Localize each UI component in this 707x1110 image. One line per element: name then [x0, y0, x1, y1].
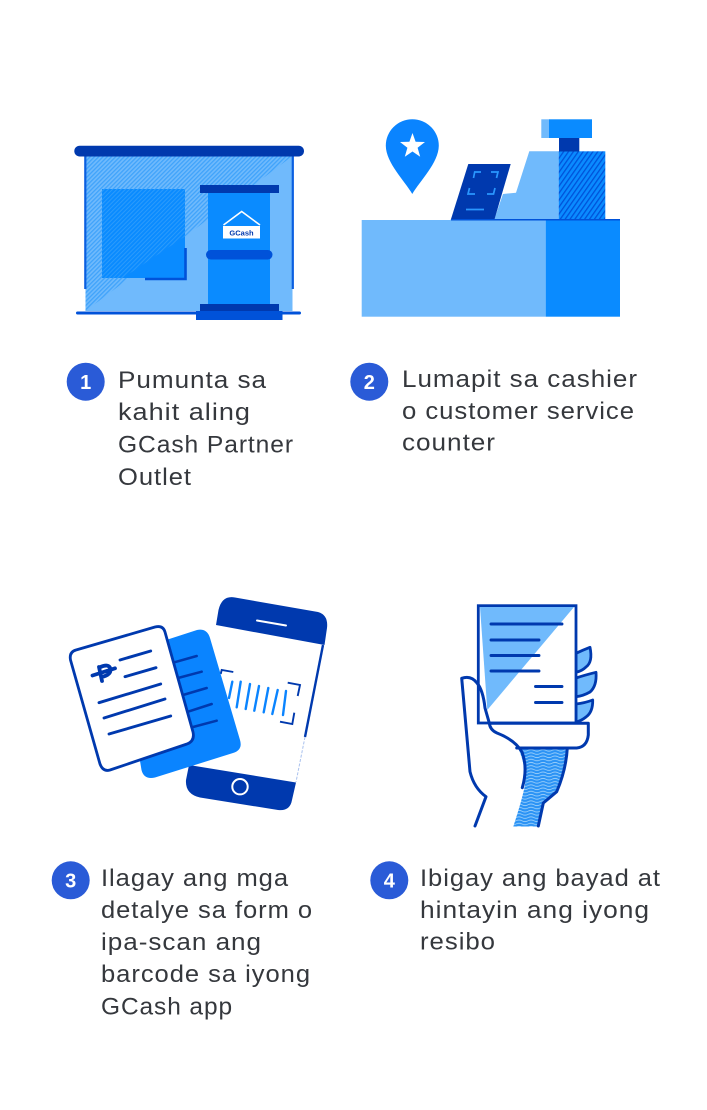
step 1: [67, 363, 294, 491]
store window: [102, 189, 186, 279]
phone: [186, 597, 327, 810]
barcode scan frame: [221, 670, 300, 724]
number badge 3: 3: [65, 870, 76, 892]
step 2 text: counter: [402, 430, 496, 456]
store roof: [74, 146, 304, 156]
card scanner: [451, 164, 511, 220]
number badge 3: [52, 861, 90, 899]
step 3 text: [101, 865, 313, 1020]
number badge 4: [370, 861, 408, 899]
receipt: [478, 606, 576, 723]
number badge 2: 2: [364, 372, 375, 394]
store ground and step: [76, 304, 301, 320]
number badge 4: 4: [384, 870, 396, 892]
step 2 text: Lumapit sa cashier: [402, 366, 638, 393]
step 2 text: [402, 366, 638, 456]
step 1 text: [118, 367, 294, 491]
step 4 text: Ibigay ang bayad at: [420, 865, 661, 892]
step 4 text: [420, 865, 661, 956]
store wall: [86, 156, 292, 311]
step 3 text: ipa-scan ang: [101, 929, 262, 956]
store side pillars: [84, 156, 294, 289]
location pin with star: [386, 119, 439, 194]
illustration: hand holding receipt: [462, 606, 596, 826]
form document: [70, 627, 193, 770]
step 3 text: detalye sa form o: [101, 897, 313, 924]
number badge 1: 1: [80, 372, 91, 394]
step 2: [350, 363, 638, 456]
cash register: [494, 119, 605, 220]
step 2 text: o customer service: [402, 398, 635, 425]
step 4: [370, 861, 661, 956]
step 3 text: Ilagay ang mga: [101, 865, 289, 892]
step 1 text: kahit aling: [118, 399, 251, 426]
hand outline: [462, 677, 588, 826]
step 3 text: GCash app: [101, 994, 233, 1020]
step 4 text: resibo: [420, 928, 496, 956]
step 3 text: barcode sa iyong: [101, 961, 311, 988]
step 4 text: hintayin ang iyong: [420, 897, 650, 924]
number badge 1: [67, 363, 105, 401]
number badge 2: [350, 363, 388, 401]
step 1 text: Pumunta sa: [118, 367, 267, 394]
step 3: [52, 861, 313, 1020]
fingers: [576, 647, 596, 722]
illustration: GCash partner outlet store: [74, 146, 304, 320]
step 1 text: GCash Partner: [118, 432, 294, 458]
step 1 text: Outlet: [118, 464, 192, 491]
door sign: GCash: GCash: [229, 228, 254, 238]
blue sheet: [130, 630, 241, 778]
illustration: cashier counter: [362, 119, 620, 317]
sleeve: [513, 748, 567, 826]
counter: [362, 219, 620, 317]
door sign: GCash: [223, 212, 260, 238]
illustration: form and phone barcode: [70, 597, 327, 810]
store door: [200, 185, 279, 305]
